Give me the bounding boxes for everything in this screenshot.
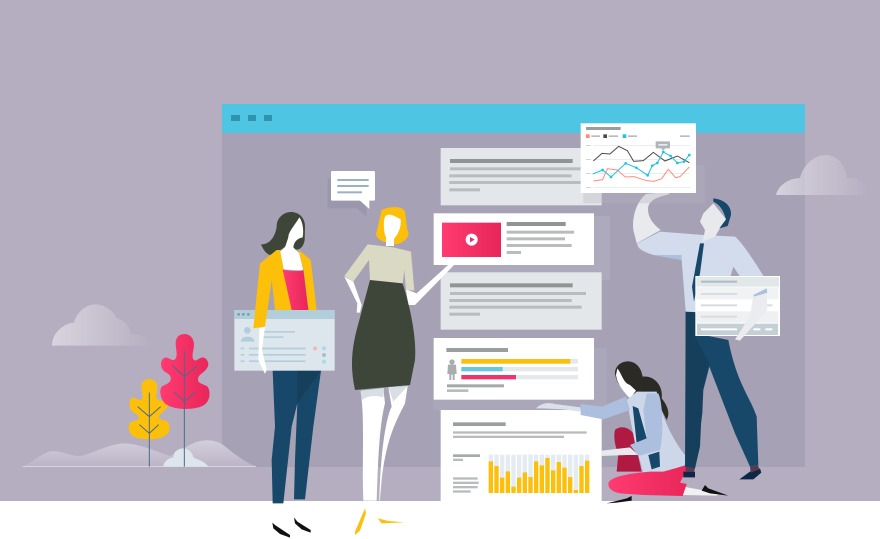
shoes (272, 517, 311, 538)
card 1 (441, 148, 602, 205)
jacket (253, 249, 317, 328)
second hand (602, 447, 638, 456)
knee (614, 427, 642, 472)
floor (0, 501, 880, 539)
top (283, 269, 308, 310)
person: kneeling woman (536, 361, 728, 503)
card 4 shadow (433, 348, 607, 411)
sleeve and hand (258, 327, 267, 374)
person: woman in yellow jacket holding panel (234, 212, 335, 538)
shoes (355, 508, 404, 535)
cloud: left (52, 304, 153, 346)
icon: person (447, 359, 457, 380)
face and neck (384, 215, 401, 246)
legs (361, 386, 408, 501)
arms (344, 258, 458, 313)
face and neck (280, 217, 303, 271)
hair (713, 198, 731, 228)
skirt (352, 280, 415, 390)
head and neck (700, 203, 727, 242)
card 2 shadow (443, 216, 610, 280)
trousers (685, 312, 758, 468)
person: blonde woman pointing at card (344, 207, 458, 535)
series: dark (593, 146, 689, 163)
cloud: right (776, 155, 870, 195)
bar: cyan (461, 367, 578, 371)
person: man holding chart (633, 192, 780, 479)
leaf: pink plant (160, 334, 210, 467)
leaf: yellow plant (129, 379, 170, 467)
holding arm (735, 288, 767, 341)
plants and hills: left (23, 304, 257, 467)
bar chart columns (489, 455, 589, 493)
bar: pink (461, 375, 578, 379)
ground line (23, 466, 256, 467)
shoes (683, 468, 761, 479)
card 3 (441, 272, 602, 330)
hand reaching (536, 403, 581, 412)
card 4: progress bars (434, 338, 594, 400)
jacket (627, 392, 692, 473)
bar: yellow (461, 359, 578, 364)
tie (633, 406, 660, 469)
arm reaching (581, 397, 630, 419)
bush (163, 448, 208, 467)
speech bubble (328, 171, 375, 217)
pants (272, 371, 321, 503)
held table panel (695, 276, 780, 336)
icon: play button (466, 234, 478, 246)
shirt (637, 232, 770, 313)
card 2: video (434, 213, 594, 265)
series: salmon (593, 167, 689, 181)
tooltip (656, 141, 670, 151)
card 5: bar chart (441, 410, 602, 501)
line chart card (581, 123, 705, 203)
hair (615, 361, 668, 420)
content cards column (434, 148, 610, 330)
hills (23, 440, 257, 467)
face (616, 368, 636, 398)
back leg and shoe (682, 487, 720, 496)
raised forearm (633, 192, 670, 243)
hair (376, 207, 408, 244)
video thumbnail (442, 223, 501, 257)
tie (692, 243, 704, 302)
skirt (608, 464, 689, 496)
browser window panel (222, 104, 805, 467)
front shoe (607, 496, 632, 503)
held panel (234, 310, 335, 371)
series: cyan (593, 151, 691, 178)
arm folded (630, 393, 662, 456)
hair (261, 212, 305, 255)
chart panel (581, 123, 696, 193)
legend (586, 134, 690, 138)
chart shadow (583, 165, 705, 203)
top (344, 244, 414, 291)
